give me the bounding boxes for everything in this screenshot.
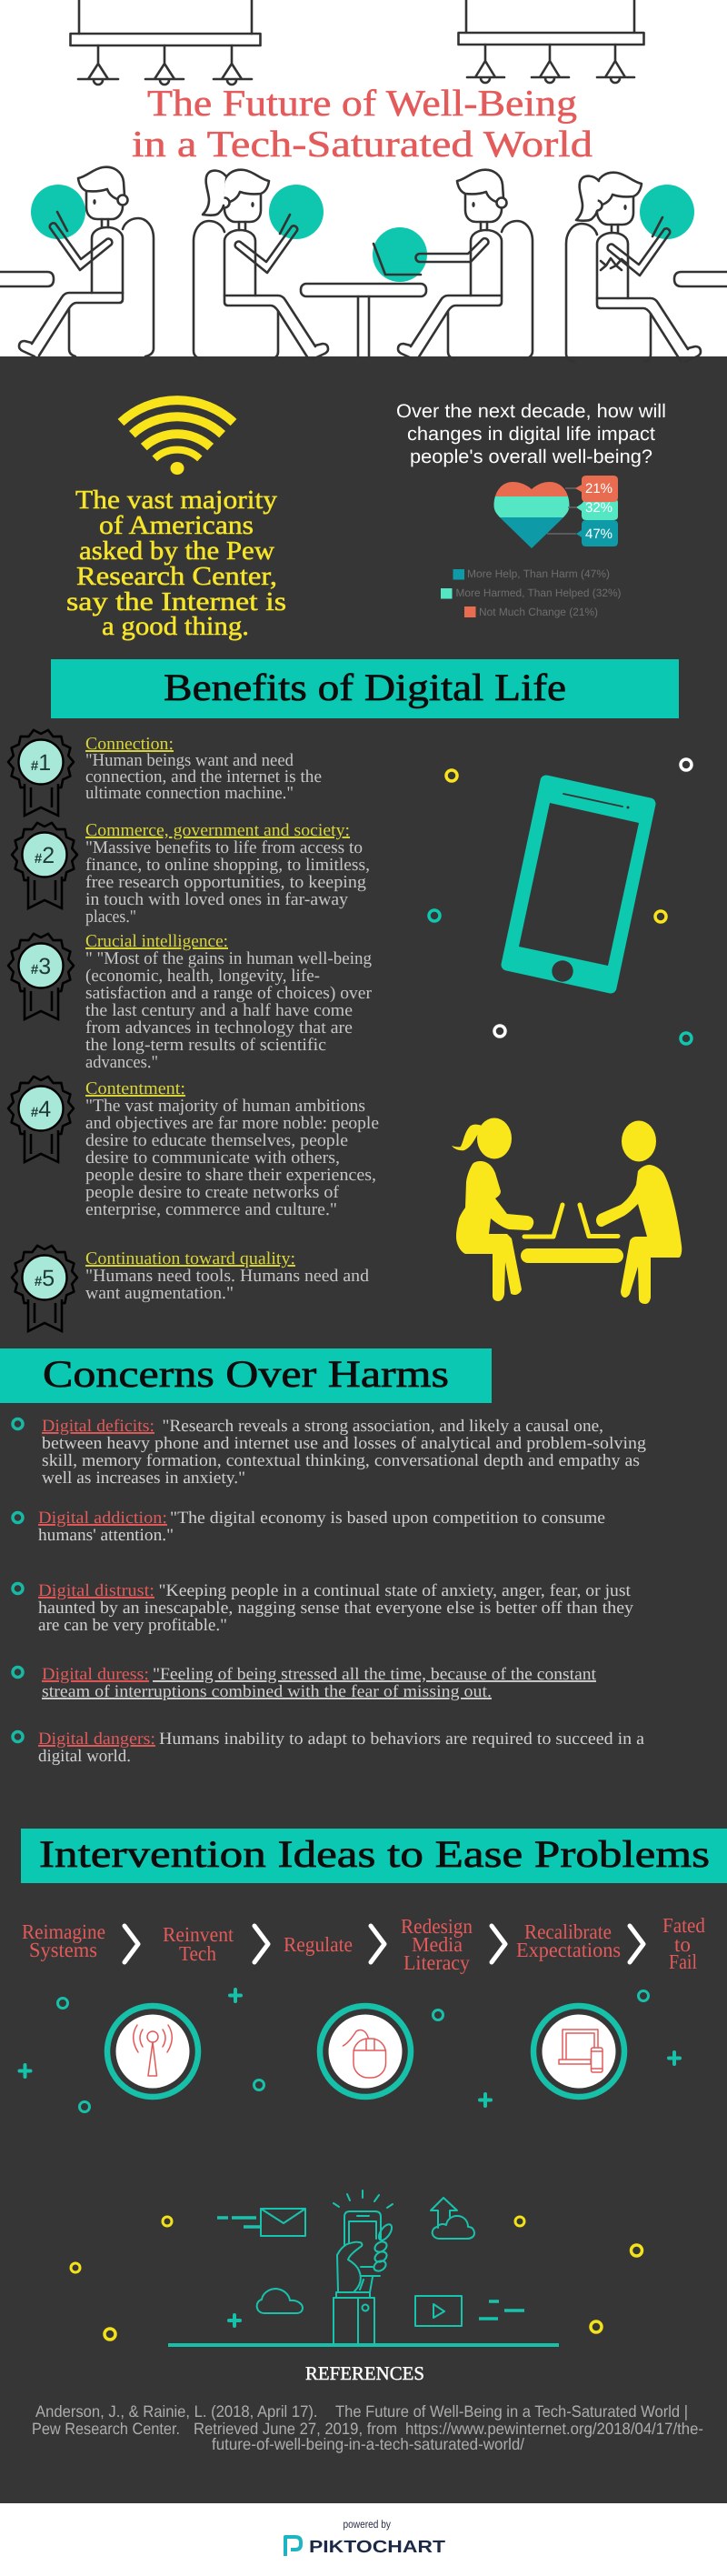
process flow: intervention steps: Reimagine: [22, 1920, 105, 1943]
concern: digital distrust: "Keeping people in a continual state of anxiety, anger, fear, or just: [158, 1581, 632, 1600]
concern: digital dangers: Humans inability to adapt to behaviors are required to succeed in a: [159, 1729, 645, 1749]
text block: citation: [32, 2402, 703, 2453]
illustration: hand holding phone with media icons: [168, 2190, 559, 2345]
icon: phone: [507, 781, 650, 987]
benefit 3: crucial intelligence: Crucial intelligence:: [85, 932, 228, 951]
benefit 1: connection: [8, 730, 322, 816]
header illustration: pendant lamps: [71, 0, 643, 85]
heading: Intervention Ideas: Intervention Ideas to Ease Problems: [39, 1834, 710, 1876]
text block: vast majority of Americans: The vast majority: [75, 486, 278, 515]
benefit 3: crucial intelligence: the long-term results of scientific: [85, 1036, 326, 1055]
concern: digital distrust: haunted by an inescapable, nagging sense that everyone else is better off than they: [38, 1599, 634, 1618]
concern: digital addiction: "The digital economy is based upon competition to consume: [170, 1509, 605, 1528]
concern: digital addiction: humans' attention.": [38, 1526, 174, 1545]
text block: vast majority of Americans: asked by the Pew: [79, 536, 274, 566]
benefit 3: crucial intelligence: the last century and a half have come: [85, 1001, 353, 1020]
concern: digital deficits: skill, memory formation, contextual thinking, conversational depth and empathy as: [42, 1451, 640, 1470]
heading: Benefits of Digital Life: Benefits of Digital Life: [164, 667, 566, 709]
text block: citation: Anderson, J., & Rainie, L. (2018, April 17).: [35, 2402, 318, 2421]
benefit 2: commerce: in touch with loved ones in far-away: [85, 890, 348, 909]
heading: Benefits of Digital Life: [51, 659, 679, 718]
chart: heart percent chart: [491, 476, 618, 550]
decorative yellow rings: [71, 2217, 642, 2340]
benefit 1: connection: #1: [31, 750, 51, 776]
benefit 2: commerce: finance, to online shopping, to limitless,: [85, 856, 370, 875]
chart heading: question: [396, 401, 666, 467]
benefit 3: crucial intelligence: (economic, health, longevity, life-: [85, 967, 320, 986]
process flow: intervention steps: Recalibrate: [524, 1920, 612, 1943]
text block: vast majority of Americans: [66, 486, 286, 641]
benefit 2: commerce: #2: [35, 843, 55, 868]
benefit 3: crucial intelligence: advances.": [85, 1053, 158, 1072]
process flow: intervention steps: Redesign: [401, 1915, 473, 1938]
icon: antenna in circle: [107, 2006, 198, 2097]
benefit 2: commerce: Commerce, government and society:: [85, 821, 350, 840]
chart legend: [441, 567, 622, 618]
concern: digital addiction: [13, 1509, 605, 1545]
concern: digital deficits: well as increases in anxiety.": [42, 1468, 245, 1488]
concern: digital duress: "Feeling of being stressed all the time, because of the constant: [153, 1665, 597, 1684]
benefit 1: connection: Connection:: [85, 735, 174, 754]
benefit 3: crucial intelligence: #3: [31, 954, 51, 979]
concern: digital deficits: "Research reveals a strong association, and likely a causal one,: [162, 1417, 603, 1436]
concern: digital dangers: Digital dangers:: [38, 1729, 155, 1749]
benefit 2: commerce: free research opportunities, to keeping: [85, 873, 366, 892]
title: in a Tech-Saturated World: [132, 123, 593, 165]
heading: references: REFERENCES: [305, 2362, 424, 2384]
heading: Intervention Ideas: [21, 1829, 727, 1883]
process flow: intervention steps: Reinvent: [163, 1923, 234, 1946]
concern: digital deficits: [13, 1417, 647, 1488]
benefit 3: crucial intelligence: from advances in technology that are: [85, 1018, 353, 1037]
benefit 3: crucial intelligence: [8, 932, 373, 1072]
process flow: intervention steps: to: [674, 1933, 691, 1956]
chart heading: question: people's overall well-being?: [410, 446, 652, 467]
process flow: intervention steps: Expectations: [516, 1939, 621, 1961]
benefit 4: contentment: desire to educate themselves, people: [85, 1131, 348, 1150]
concern: digital duress: Digital duress:: [42, 1665, 149, 1684]
benefit 5: continuation toward quality: Continuation toward quality:: [85, 1249, 295, 1268]
chart legend: Not Much Change (21%): [479, 606, 598, 618]
footer: powered by Piktochart: powered by: [344, 2518, 391, 2531]
decorative rings and plus marks: [20, 1990, 680, 2326]
text block: vast majority of Americans: say the Internet is: [66, 587, 286, 616]
concern: digital duress: stream of interruptions combined with the fear of missing out.: [42, 1682, 492, 1701]
text block: citation: future-of-well-being-in-a-tech-saturated-world/: [212, 2435, 524, 2453]
chart legend: More Help, Than Harm (47%): [467, 567, 610, 580]
text block: vast majority of Americans: a good thing.: [102, 612, 249, 641]
benefit 4: contentment: and objectives are far more noble: people: [85, 1114, 379, 1133]
benefit 4: contentment: enterprise, commerce and culture.": [85, 1200, 337, 1219]
footer: powered by Piktochart: PIKTOCHART: [309, 2538, 445, 2557]
benefit 4: contentment: desire to communicate with others,: [85, 1148, 340, 1168]
concern: digital distrust: [13, 1581, 634, 1635]
benefit 5: continuation toward quality: [12, 1246, 369, 1331]
benefit 2: commerce: "Massive benefits to life from access to: [85, 838, 363, 857]
process flow: intervention steps: Fail: [669, 1950, 697, 1973]
benefit 4: contentment: Contentment:: [85, 1079, 185, 1098]
benefit 5: continuation toward quality: "Humans need tools. Humans need and: [85, 1267, 369, 1286]
benefit 2: commerce: places.": [85, 907, 136, 927]
process flow: intervention steps: Systems: [29, 1939, 97, 1961]
benefit 1: connection: "Human beings want and need: [85, 751, 294, 770]
concern: digital deficits: between heavy phone and internet use and losses of analytical and problem-solving: [42, 1434, 647, 1453]
icon: laptop and phone in circle: [533, 2006, 624, 2097]
chart: heart percent chart: 21%: [585, 481, 612, 496]
benefit 3: crucial intelligence: satisfaction and a range of choices) over: [85, 984, 373, 1003]
chart heading: question: Over the next decade, how will: [396, 401, 666, 422]
header illustration: people at tables: [0, 167, 727, 362]
text block: citation: Pew Research Center.: [32, 2420, 180, 2438]
chart: heart percent chart: 47%: [585, 526, 612, 542]
benefit 5: continuation toward quality: #5: [35, 1266, 55, 1291]
heading: Concerns Over Harms: [0, 1348, 492, 1403]
process flow: intervention steps: [22, 1914, 705, 1974]
benefit 4: contentment: people desire to share their experiences,: [85, 1166, 376, 1185]
benefit 1: connection: connection, and the internet is the: [85, 767, 322, 787]
benefit 4: contentment: people desire to create networks of: [85, 1183, 340, 1202]
concern: digital deficits: Digital deficits:: [42, 1417, 154, 1436]
process flow: intervention steps: Literacy: [403, 1951, 470, 1974]
concern: digital distrust: Digital distrust:: [38, 1581, 154, 1600]
benefit 4: contentment: "The vast majority of human ambitions: [85, 1097, 365, 1116]
footer: powered by Piktochart: [0, 2503, 727, 2576]
benefit 2: commerce: [12, 821, 370, 927]
process flow: intervention steps: Tech: [179, 1942, 216, 1965]
text block: vast majority of Americans: of Americans: [99, 511, 254, 540]
icon: mouse in circle: [320, 2006, 411, 2097]
title: [132, 82, 593, 165]
benefit 4: contentment: #4: [31, 1097, 51, 1122]
concern: digital duress: [13, 1665, 597, 1701]
chart heading: question: changes in digital life impact: [407, 424, 655, 445]
icon: wifi: [121, 400, 234, 475]
process flow: intervention steps: Fated: [662, 1914, 705, 1937]
decorative rings around phone: [429, 759, 692, 1044]
process flow: intervention steps: Regulate: [284, 1933, 353, 1956]
concern: digital dangers: digital world.: [38, 1747, 131, 1766]
icon: two people at laptops: [452, 1118, 682, 1304]
process flow: intervention steps: Media: [412, 1933, 463, 1956]
text block: citation: The Future of Well-Being in a Tech-Saturated World |: [335, 2402, 688, 2421]
text block: citation: https://www.pewinternet.org/2018/04/17/the-: [405, 2420, 703, 2438]
heading: Concerns Over Harms: Concerns Over Harms: [43, 1354, 449, 1396]
title: The Future of Well-Being: [147, 82, 577, 124]
chart legend: More Harmed, Than Helped (32%): [456, 586, 622, 599]
text block: citation: Retrieved June 27, 2019, from: [194, 2420, 397, 2438]
benefit 1: connection: ultimate connection machine.": [85, 784, 294, 803]
benefit 3: crucial intelligence: " "Most of the gains in human well-being: [85, 949, 372, 968]
text block: vast majority of Americans: Research Center,: [76, 562, 277, 591]
concern: digital dangers: [13, 1729, 645, 1766]
chart: heart percent chart: 32%: [585, 500, 612, 516]
benefit 5: continuation toward quality: want augmentation.": [85, 1284, 234, 1303]
benefit 4: contentment: [8, 1077, 379, 1219]
concern: digital distrust: are can be very profitable.": [38, 1616, 227, 1635]
concern: digital addiction: Digital addiction:: [38, 1509, 167, 1528]
